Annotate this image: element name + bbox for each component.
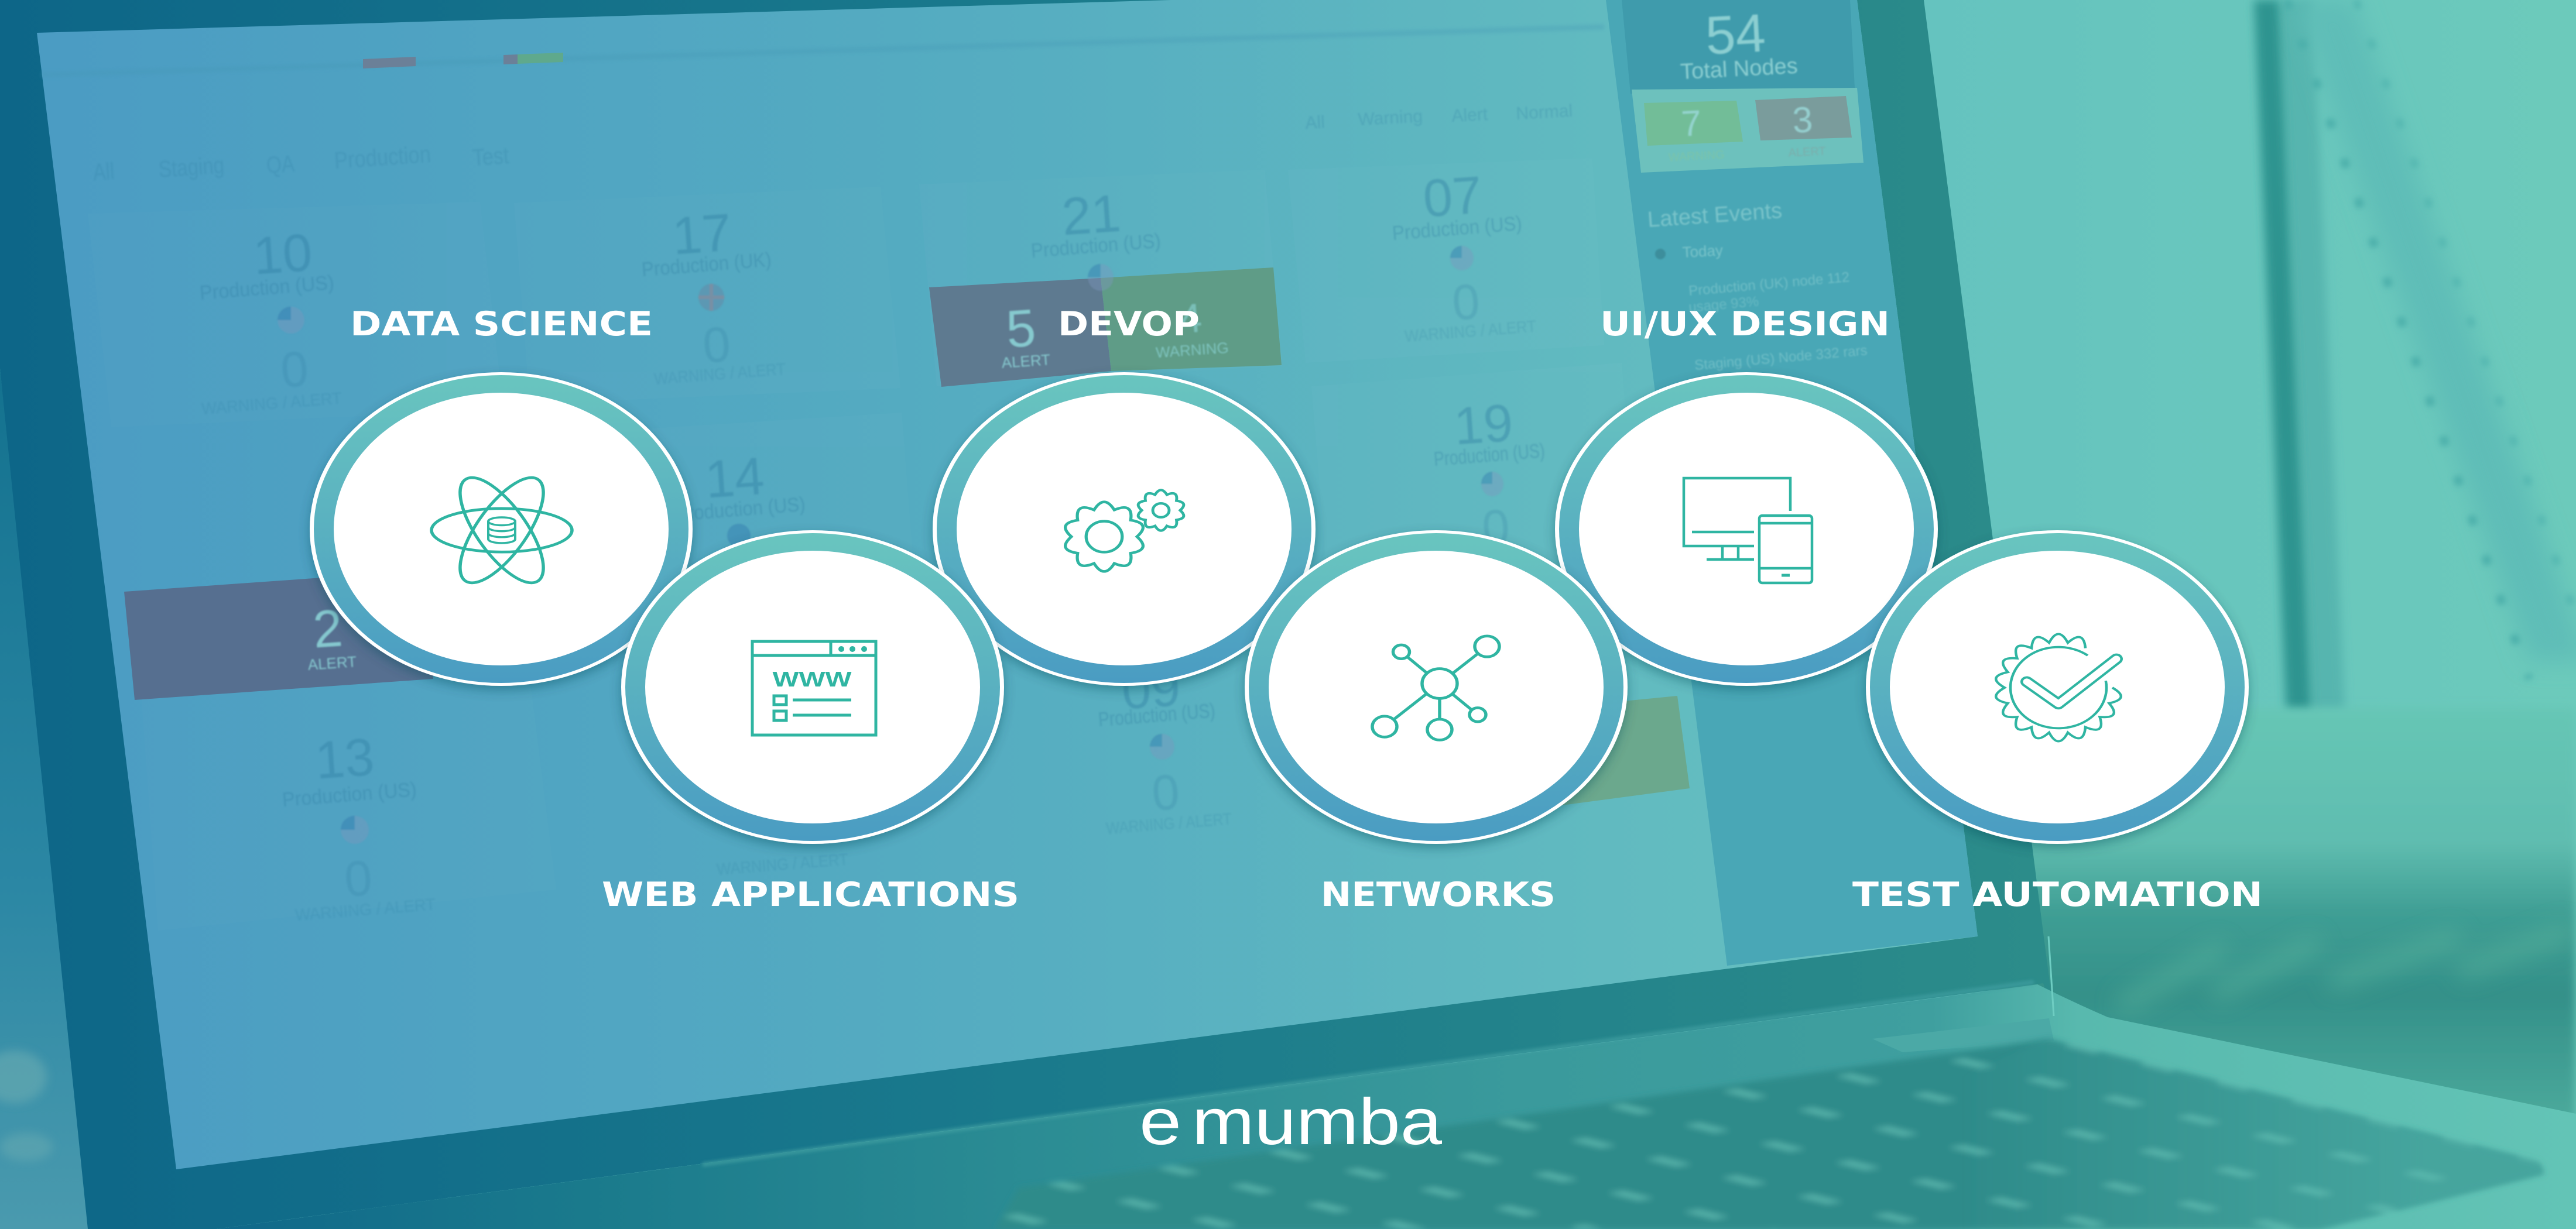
filter tabs: Test [472,143,509,171]
circle: devop [933,372,1316,686]
sidebar text [1647,3,1868,373]
environment captions: Production (US) [1098,699,1216,731]
today marker [1655,249,1666,259]
environment captions: Production (UK) [641,249,772,281]
sidebar counter panel [1632,88,1864,173]
hinge edge line [2049,936,2054,1016]
sidebar panel [1606,0,1978,966]
icon: two gears [1066,490,1184,571]
sidebar warning tile [1644,101,1743,146]
box figures and labels on the coloured alert boxes: 2 [311,599,344,660]
big node counts: 13 [313,728,376,790]
filter tabs: All [93,159,115,186]
warning and alert captions: WARNING / ALERT [201,389,342,418]
filter tabs [93,142,509,186]
icon: atom with database [431,468,572,593]
icon: gear with check mark [1996,634,2121,741]
region flags [278,246,1503,844]
box figures and labels on the coloured alert boxes: WARNING [1155,339,1229,361]
icon: browser window [752,641,876,735]
sidebar total box [1622,0,1855,94]
environment captions: Production (US) [1433,440,1546,471]
lid lower highlight [703,982,2034,1165]
background: blurred desk surface [1991,708,2576,1176]
latest events heading: Latest Events [1647,198,1783,232]
circle: ui/ux design [1555,372,1938,686]
heading: web applications: WEB APPLICATIONS [602,876,1019,914]
filter tabs: Production [334,142,431,174]
dashboard toolbar colour chips [363,53,563,68]
environment captions: Production (US) [282,778,417,811]
total nodes caption: Total Nodes [1680,54,1799,84]
status tabs: Alert [1451,105,1489,126]
warning and alert captions [201,317,1537,924]
box figures and labels on the coloured alert boxes: ALERT [1001,351,1051,372]
dashboard card backgrounds [88,158,1639,931]
circle: web applications [621,530,1004,844]
big node counts: 17 [670,204,733,266]
dashboard toolbar divider [41,27,1604,75]
box figures and labels on the coloured alert boxes [307,295,1229,674]
circle: data science [310,372,693,686]
dashboard text and flags [93,101,1573,924]
warning and alert captions: WARNING / ALERT [294,895,436,924]
laptop screen [37,0,1978,1169]
browser www text: WWW [773,667,852,691]
alert caption: ALERT [1788,145,1826,160]
environment captions: Production (US) [675,493,806,526]
heading: devop: DEVOP [1058,305,1200,344]
event two: Staging (US) Node 332 rars [1694,342,1868,373]
background: blurred ruler on the wall [2254,0,2576,711]
logo: emumba: e [1139,1085,1181,1158]
today caption: Today [1682,241,1724,261]
laptop base [217,936,2576,1229]
icon: network hub and nodes [1372,636,1499,740]
alert box centre [929,278,1111,387]
status tabs: Warning [1358,107,1423,129]
warning count: 7 [1680,103,1703,145]
keys: lighter right-side keys [1961,1039,2544,1229]
keyboard [995,1039,2544,1229]
zero counters: 0 [701,317,732,373]
zero counters: 0 [1480,499,1512,556]
filter tabs: Staging [158,152,225,183]
alert count: 3 [1791,99,1814,141]
environment captions: Production (US) [1030,230,1162,262]
event one: Production (UK) node 112 [1688,269,1850,299]
zero counters [279,274,1512,907]
big node counts [251,166,1515,790]
big node counts: 10 [251,224,314,286]
warning and alert captions: WARNING / ALERT [716,850,849,878]
icon: monitor and tablet [1684,478,1812,583]
total nodes value: 54 [1704,3,1767,66]
sidebar alert tile [1755,96,1852,140]
warning caption: WARNING [1668,149,1725,164]
zero counters: 0 [1150,764,1181,821]
logo: emumba: mumba [1192,1085,1443,1158]
heading: ui/ux design: UI/UX DESIGN [1600,305,1890,344]
big node counts: 09 [1119,658,1182,720]
heading: data science: DATA SCIENCE [350,305,653,344]
box figures and labels on the coloured alert boxes: 4 [1177,295,1203,342]
big node counts: 19 [1452,394,1515,456]
status tabs: All [1305,112,1325,133]
background: blurred objects left of laptop [0,369,94,1229]
warning and alert captions: WARNING / ALERT [1105,809,1232,837]
warning box right [1522,696,1690,811]
filter tabs: QA [266,151,296,178]
warning and alert captions: WARNING / ALERT [653,359,786,388]
alert box left [124,571,433,700]
box figures and labels on the coloured alert boxes: ALERT [307,653,357,674]
environment captions [199,212,1546,811]
circle: networks [1245,530,1628,844]
heading: networks: NETWORKS [1321,876,1556,914]
heading: test automation: TEST AUTOMATION [1852,876,2263,914]
zero counters: 0 [279,341,310,398]
zero counters: 0 [1450,274,1482,331]
zero counters: 0 [342,850,374,907]
circle: test automation [1866,530,2249,844]
big node counts: 07 [1421,166,1484,228]
warning and alert captions: WARNING / ALERT [1404,317,1537,345]
status tabs [1305,101,1573,133]
environment captions: Production (US) [1392,212,1523,245]
event one detail: usage 93% [1688,294,1759,315]
big node counts: 14 [703,447,766,509]
laptop lid bezel [0,0,2054,1229]
big node counts: 21 [1060,184,1122,246]
status tabs: Normal [1516,101,1573,123]
box figures and labels on the coloured alert boxes: 5 [1004,298,1037,359]
warning box centre [1101,267,1282,371]
environment captions: Production (US) [199,272,335,304]
hinge panel [1872,1018,2054,1052]
